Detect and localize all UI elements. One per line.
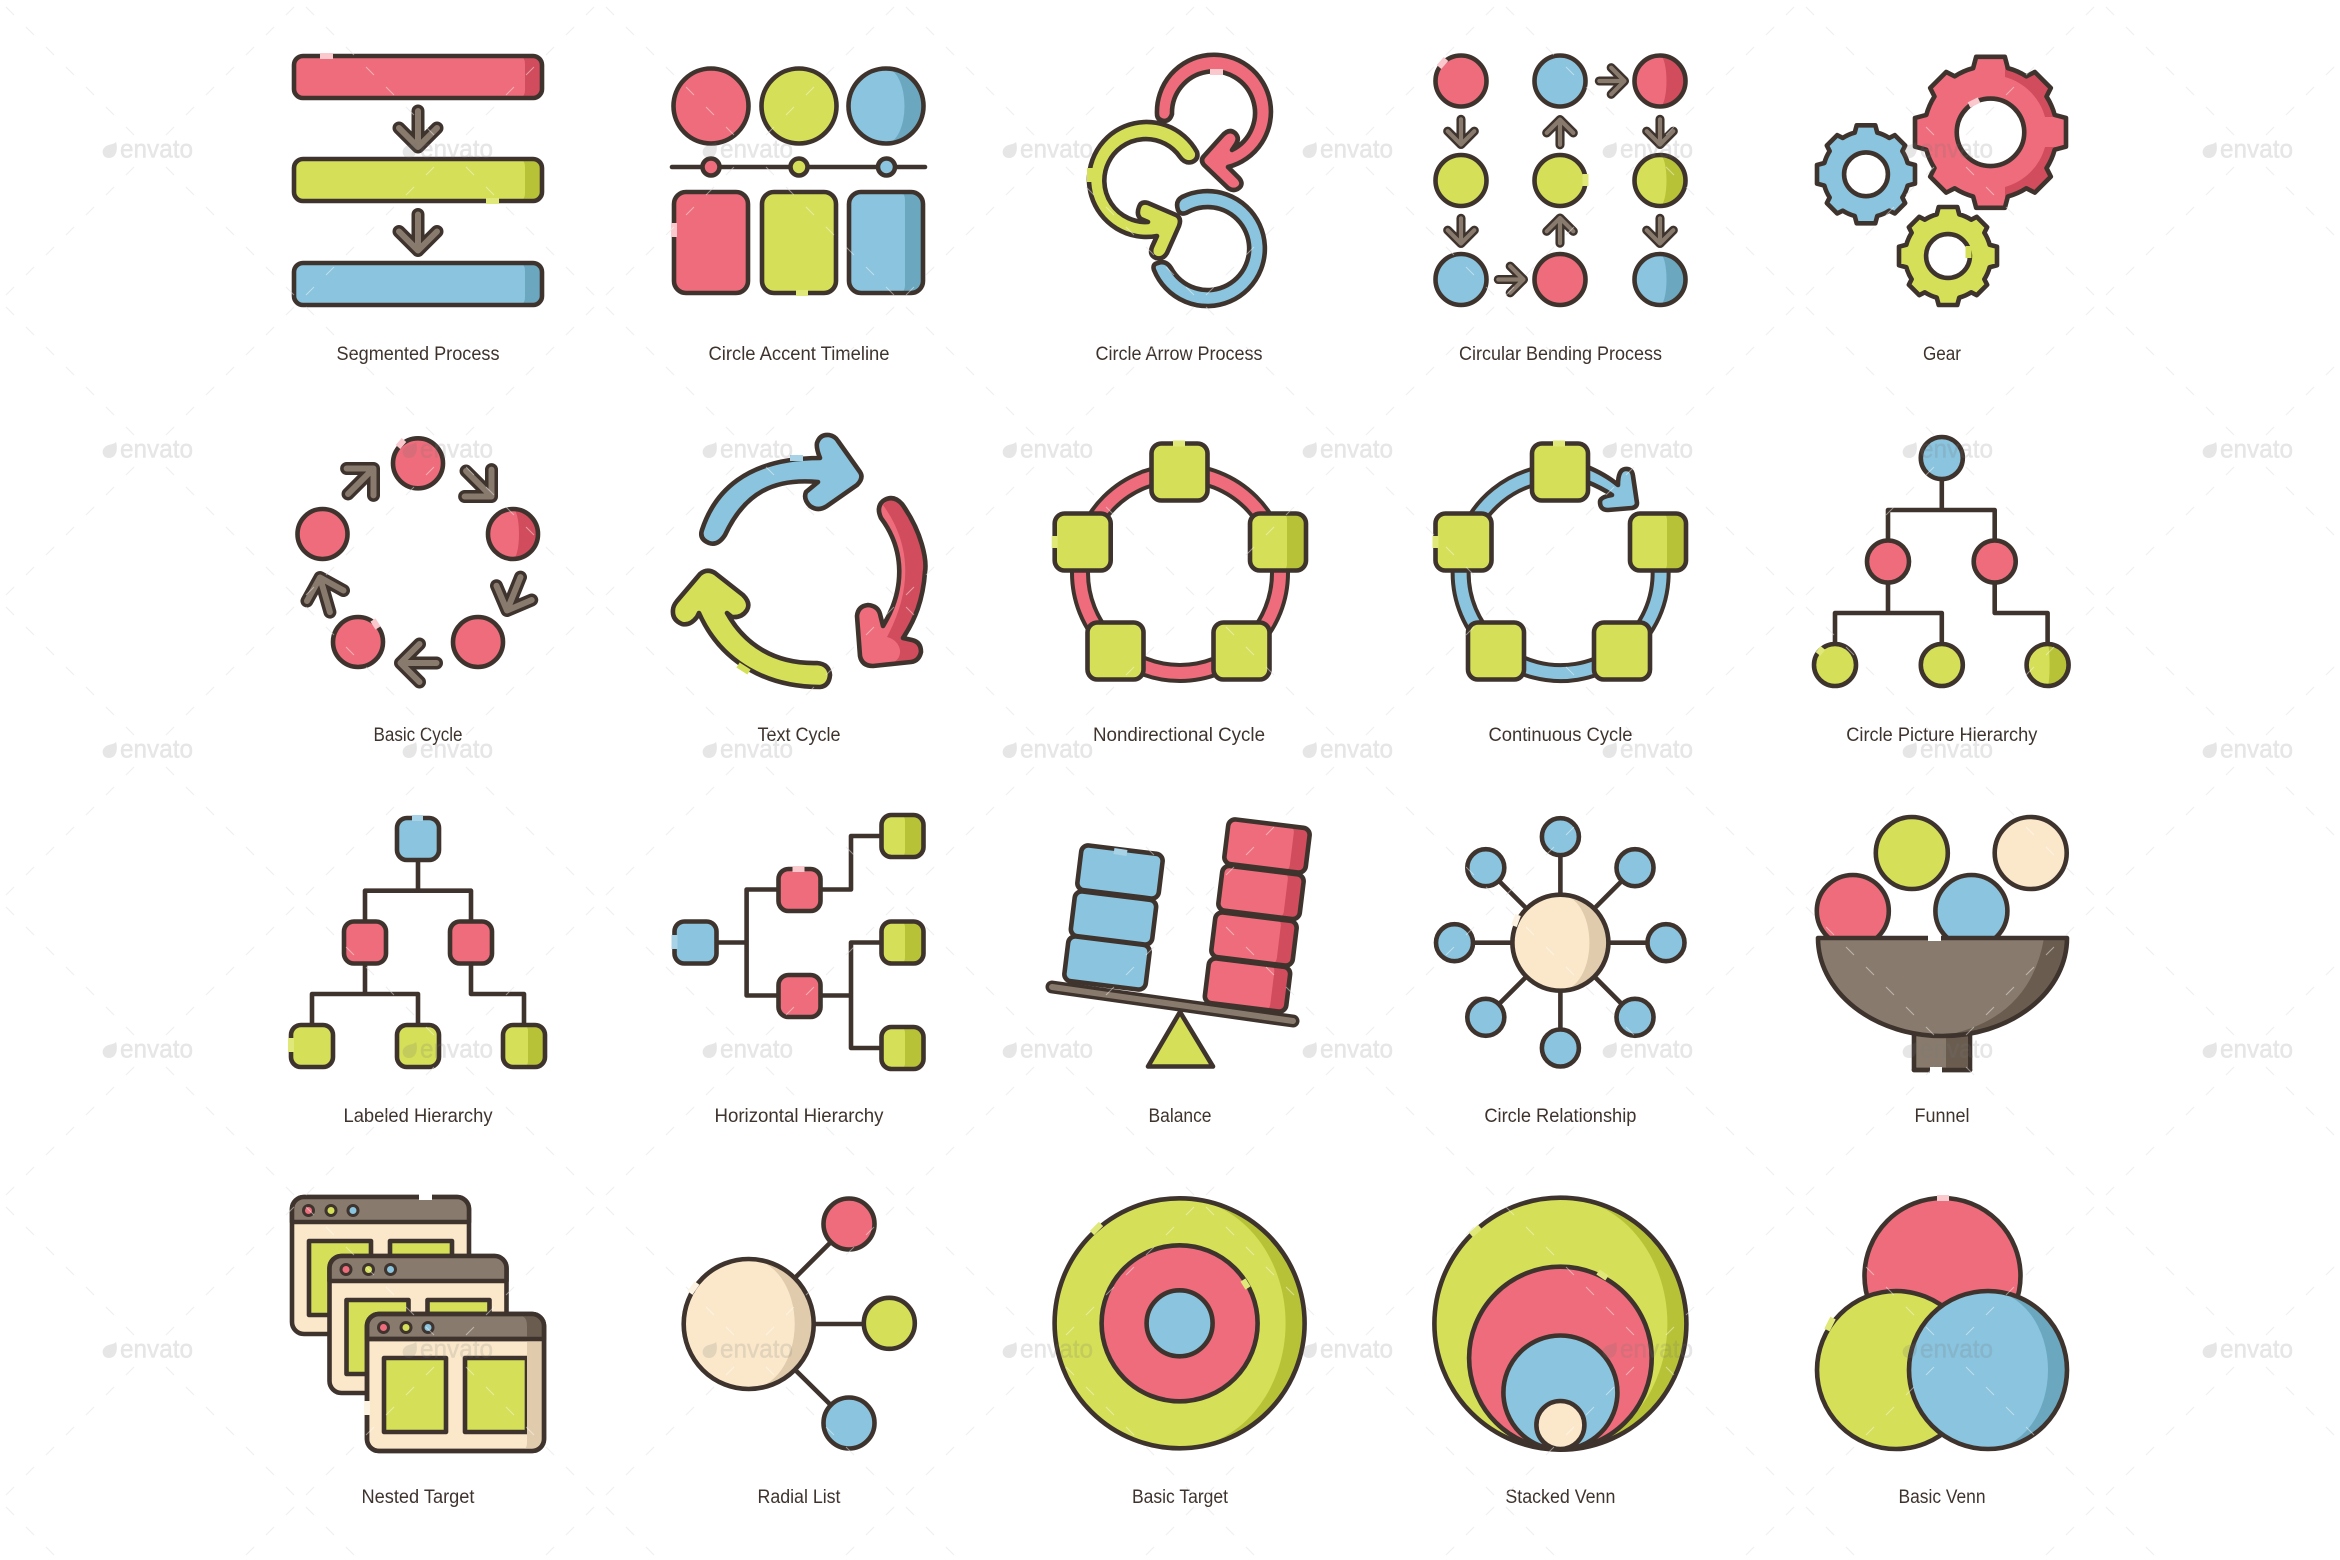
watermark grid: envato xyxy=(1620,133,1693,163)
watermark grid: envato xyxy=(720,433,793,463)
watermark grid: envato xyxy=(2220,133,2293,163)
icon: concentric target xyxy=(1055,1198,1305,1448)
label: Basic Cycle xyxy=(374,725,462,746)
label: Circle Arrow Process xyxy=(1096,344,1262,365)
watermark grid: envato xyxy=(120,733,193,763)
panel: Circle Picture Hierarchy xyxy=(1814,437,2069,746)
panel: Nested Target xyxy=(292,1197,544,1508)
watermark grid: envato xyxy=(120,133,193,163)
label: Radial List xyxy=(758,1487,841,1508)
watermark grid xyxy=(103,133,2293,1363)
panel: Balance xyxy=(1052,819,1310,1127)
watermark grid: envato xyxy=(1320,1033,1393,1063)
label: Balance xyxy=(1148,1106,1212,1127)
icon: three circle venn xyxy=(1817,1198,2067,1449)
watermark grid: envato xyxy=(1320,133,1393,163)
panel: Continuous Cycle xyxy=(1436,444,1686,746)
watermark grid: envato xyxy=(420,1033,493,1063)
panel: Segmented Process xyxy=(294,56,542,365)
icon: stacked browser windows xyxy=(292,1197,544,1451)
label: Circle Relationship xyxy=(1484,1106,1636,1127)
label: Stacked Venn xyxy=(1505,1487,1615,1508)
label: Segmented Process xyxy=(336,344,500,365)
icon: nondirectional cycle xyxy=(1055,444,1306,680)
watermark grid: envato xyxy=(120,1333,193,1363)
watermark grid: envato xyxy=(1320,433,1393,463)
panel: Stacked Venn xyxy=(1434,1198,1686,1508)
icon: basic cycle xyxy=(298,438,538,682)
watermark grid: envato xyxy=(420,433,493,463)
label: Nested Target xyxy=(362,1487,475,1508)
label: Continuous Cycle xyxy=(1488,725,1632,746)
panel: Circle Relationship xyxy=(1436,818,1684,1127)
watermark grid: envato xyxy=(2220,433,2293,463)
watermark grid: envato xyxy=(1920,733,1993,763)
icon: horizontal hierarchy xyxy=(674,815,924,1069)
panel: Circular Bending Process xyxy=(1436,56,1686,365)
watermark grid: envato xyxy=(1020,733,1093,763)
watermark grid: envato xyxy=(1020,433,1093,463)
label: Basic Venn xyxy=(1898,1487,1986,1508)
watermark grid: envato xyxy=(420,1333,493,1363)
watermark grid: envato xyxy=(1620,1033,1693,1063)
label: Nondirectional Cycle xyxy=(1093,725,1265,746)
watermark grid: envato xyxy=(720,1033,793,1063)
icon: three gears xyxy=(1817,50,2075,305)
watermark grid: envato xyxy=(2220,1333,2293,1363)
panel: Basic Target xyxy=(1055,1198,1305,1508)
watermark grid: envato xyxy=(1020,1333,1093,1363)
panel: Radial List xyxy=(684,1198,915,1508)
watermark grid: envato xyxy=(1320,1333,1393,1363)
panel: Text Cycle xyxy=(673,435,925,746)
label: Circle Accent Timeline xyxy=(708,344,890,365)
panel: Funnel xyxy=(1817,817,2067,1127)
icon: balance scale xyxy=(1052,819,1310,1066)
panel: Labeled Hierarchy xyxy=(291,818,545,1127)
icon: stacked venn xyxy=(1434,1198,1686,1450)
icon: circular bending process xyxy=(1436,56,1686,305)
watermark grid: envato xyxy=(120,433,193,463)
label: Horizontal Hierarchy xyxy=(714,1106,884,1127)
icon: circle hierarchy xyxy=(1814,437,2069,686)
label: Gear xyxy=(1923,344,1962,365)
label: Text Cycle xyxy=(758,725,840,746)
watermark grid: envato xyxy=(2220,733,2293,763)
panel: Circle Accent Timeline xyxy=(672,68,925,365)
watermark grid: envato xyxy=(2220,1033,2293,1063)
icon: continuous cycle xyxy=(1436,444,1686,680)
label: Circular Bending Process xyxy=(1459,344,1662,365)
watermark grid: envato xyxy=(420,133,493,163)
icon: funnel with balls xyxy=(1817,817,2067,1070)
watermark grid: envato xyxy=(1620,1333,1693,1363)
watermark grid: envato xyxy=(1020,133,1093,163)
icon: circle accent timeline xyxy=(672,68,925,293)
panel: Gear xyxy=(1817,50,2075,365)
label: Funnel xyxy=(1914,1106,1970,1127)
panel: Basic Venn xyxy=(1817,1198,2067,1508)
icon: circle arrows xyxy=(1089,55,1271,306)
label: Labeled Hierarchy xyxy=(344,1106,493,1127)
label: Basic Target xyxy=(1132,1487,1229,1508)
watermark grid: envato xyxy=(1020,1033,1093,1063)
icon: radial list xyxy=(684,1198,915,1448)
panel: Circle Arrow Process xyxy=(1089,55,1271,365)
watermark grid: envato xyxy=(1920,133,1993,163)
watermark grid: envato xyxy=(420,733,493,763)
panel: Nondirectional Cycle xyxy=(1055,444,1306,746)
icon: text cycle arrows xyxy=(673,435,925,687)
watermark grid: envato xyxy=(1620,433,1693,463)
watermark grid: envato xyxy=(720,733,793,763)
icon: box hierarchy xyxy=(291,818,545,1067)
label: Circle Picture Hierarchy xyxy=(1846,725,2038,746)
watermark grid: envato xyxy=(720,133,793,163)
watermark grid: envato xyxy=(1320,733,1393,763)
watermark grid: envato xyxy=(1920,433,1993,463)
watermark grid: envato xyxy=(1920,1333,1993,1363)
watermark grid: envato xyxy=(1620,733,1693,763)
icon: segmented process bars xyxy=(294,56,542,305)
watermark grid: envato xyxy=(1920,1033,1993,1063)
icon: circle relationship xyxy=(1436,818,1684,1066)
watermark grid: envato xyxy=(720,1333,793,1363)
watermark grid: envato xyxy=(120,1033,193,1063)
panel: Basic Cycle xyxy=(298,438,538,746)
panel: Horizontal Hierarchy xyxy=(674,815,924,1127)
